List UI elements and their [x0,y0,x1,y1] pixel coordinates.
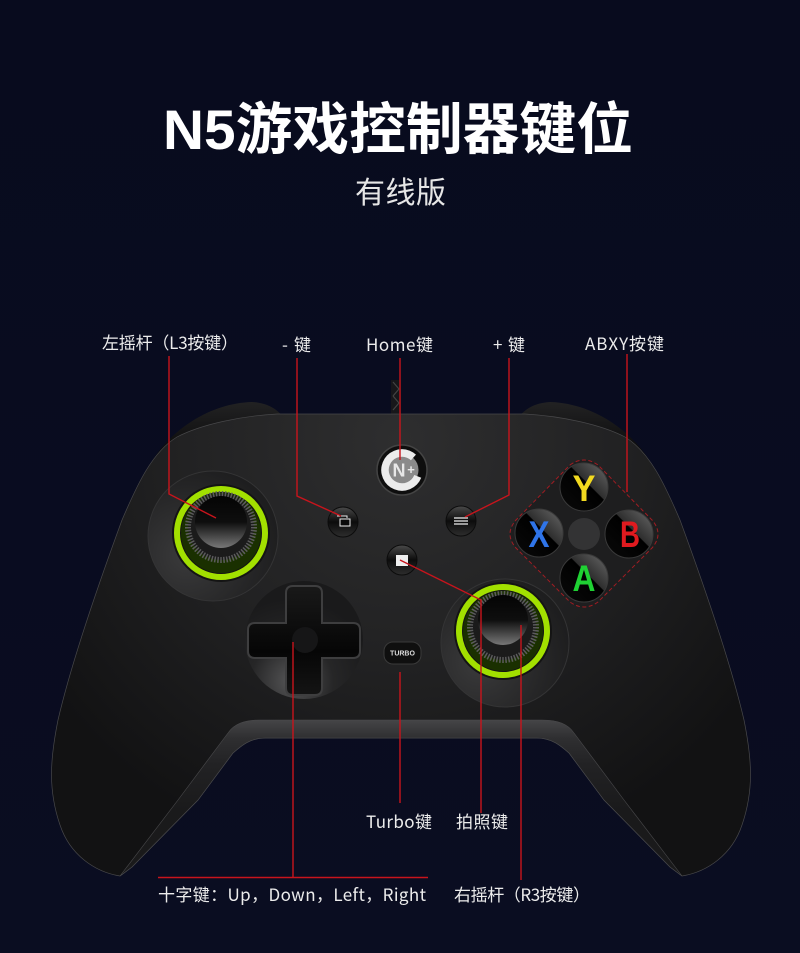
label: photo key: 拍照键 [456,808,508,833]
home button: + [407,462,415,477]
icon: cable [391,380,401,416]
label: turbo key: Turbo键 [366,808,432,833]
button Y [560,463,608,511]
lower bracket [120,720,682,876]
label: ABXY keys: ABXY按键 [585,330,664,355]
label: right stick: 右摇杆（R3按键） [454,881,590,906]
button X: X [528,514,550,555]
label: left stick: 左摇杆（L3按键） [102,329,238,354]
minus button [328,507,358,537]
callout lines [158,354,627,880]
right stick [441,579,569,707]
label: d-pad: 十字键：Up，Down，Left，Right [158,881,427,906]
left bumper [148,402,284,468]
home button: N [392,460,406,480]
button Y: Y [572,468,596,509]
subtitle: 有线版 [355,177,446,210]
controller [52,402,750,876]
left stick [148,471,278,601]
button B [605,510,653,558]
ABXY buttons [510,460,658,607]
plus button [446,506,476,536]
controller body [52,414,750,876]
home button [377,445,427,495]
turbo button: TURBO [390,650,415,658]
turbo button [384,642,421,664]
button A: A [572,558,596,599]
label: plus key: + 键 [493,331,525,356]
label: home key: Home键 [366,331,433,356]
d-pad [245,581,363,699]
right bumper [518,402,654,468]
photo button [387,545,417,575]
button A [560,554,608,602]
button X [515,509,563,557]
label: minus key: - 键 [282,331,311,356]
title: N5游戏控制器键位 [163,98,633,161]
button B: B [620,514,640,555]
